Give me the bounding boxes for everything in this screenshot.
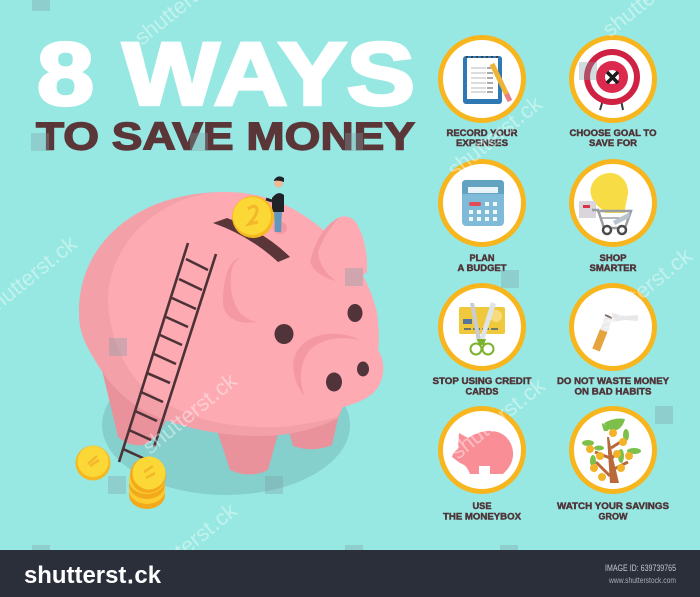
footer image id: IMAGE ID: 639739765 [605, 563, 676, 573]
badge circle [572, 162, 654, 244]
badge circle [572, 38, 654, 120]
label: PLAN [470, 253, 495, 264]
label: SHOP [600, 253, 627, 264]
panel: record your expenses [440, 38, 524, 149]
panel: do not waste money on bad habits [557, 286, 670, 398]
ear crescent [310, 217, 340, 281]
pig body [79, 192, 383, 436]
icon: broken cigarette [596, 313, 638, 350]
icon: notepad and pencil [463, 56, 510, 104]
icon: money tree [582, 418, 641, 483]
panel: use the moneybox [440, 408, 524, 522]
panel: stop using credit cards: CARDS [466, 386, 498, 398]
loose coin [76, 446, 110, 480]
stock watermarks: shutterst․ck [137, 367, 242, 459]
pig body highlight [108, 192, 383, 427]
snout [293, 334, 360, 397]
coin at the slot [232, 196, 274, 238]
panel: watch your savings grow: GROW [598, 512, 628, 522]
nostrils [326, 362, 369, 392]
panel: record your expenses: EXPENSES [456, 138, 508, 149]
subtitle: to save money: TO SAVE MONEY [36, 116, 415, 158]
icon: calculator [462, 180, 504, 226]
label: STOP USING CREDIT [432, 376, 532, 387]
icon: light bulb in cart [579, 173, 631, 234]
panel: watch your savings grow [557, 408, 669, 522]
illustration: piggy bank with ladder and coins [76, 176, 383, 509]
stock watermarks: shutterst․ck [442, 90, 547, 182]
stock watermarks: shutterst․ck [137, 497, 242, 589]
panel: stop using credit cards [432, 286, 532, 398]
footer bar [0, 550, 700, 597]
coin stack [129, 456, 166, 509]
icon: target with cross [584, 49, 640, 110]
title: 8 ways: 8 WAYS [37, 24, 415, 124]
panel: do not waste money on bad habits: ON BAD HABITS [574, 386, 652, 398]
small man pushing coin [266, 176, 287, 234]
panel: shop smarter [572, 162, 654, 274]
ladder [119, 243, 216, 462]
pig legs [102, 370, 339, 474]
label: USE [472, 501, 492, 512]
label: CHOOSE GOAL TO [570, 128, 656, 139]
label: RECORD YOUR [446, 128, 518, 139]
panel: shop smarter: SMARTER [590, 263, 637, 274]
icon: pink piggy bank [452, 431, 513, 474]
coin slot [213, 218, 290, 262]
stock watermarks: shutterst․ck [445, 372, 550, 464]
badge circle [572, 286, 654, 368]
badge circle [440, 408, 524, 492]
panel: plan a budget: A BUDGET [458, 263, 507, 274]
panel: use the moneybox: THE MONEYBOX [443, 512, 522, 522]
stock watermarks: shutterst․ck [592, 242, 697, 334]
panel: choose goal to save for: SAVE FOR [589, 138, 637, 149]
label: WATCH YOUR SAVINGS [557, 501, 669, 512]
eyes [274, 304, 362, 344]
label: DO NOT WASTE MONEY [557, 376, 670, 387]
panel: choose goal to save for [570, 38, 656, 149]
footer url: www.shutterstock.com [608, 576, 676, 585]
icon: scissors cutting a card [459, 302, 505, 354]
badge circle [440, 286, 524, 368]
panel: plan a budget [440, 162, 524, 274]
badge circle [572, 408, 654, 492]
pig ear [310, 216, 367, 282]
footer logo: shutterst․ck [24, 562, 162, 589]
pig side ear crescent [223, 258, 257, 323]
ground shadow [102, 355, 350, 495]
badge circle [440, 162, 524, 244]
badge circle [440, 38, 524, 120]
